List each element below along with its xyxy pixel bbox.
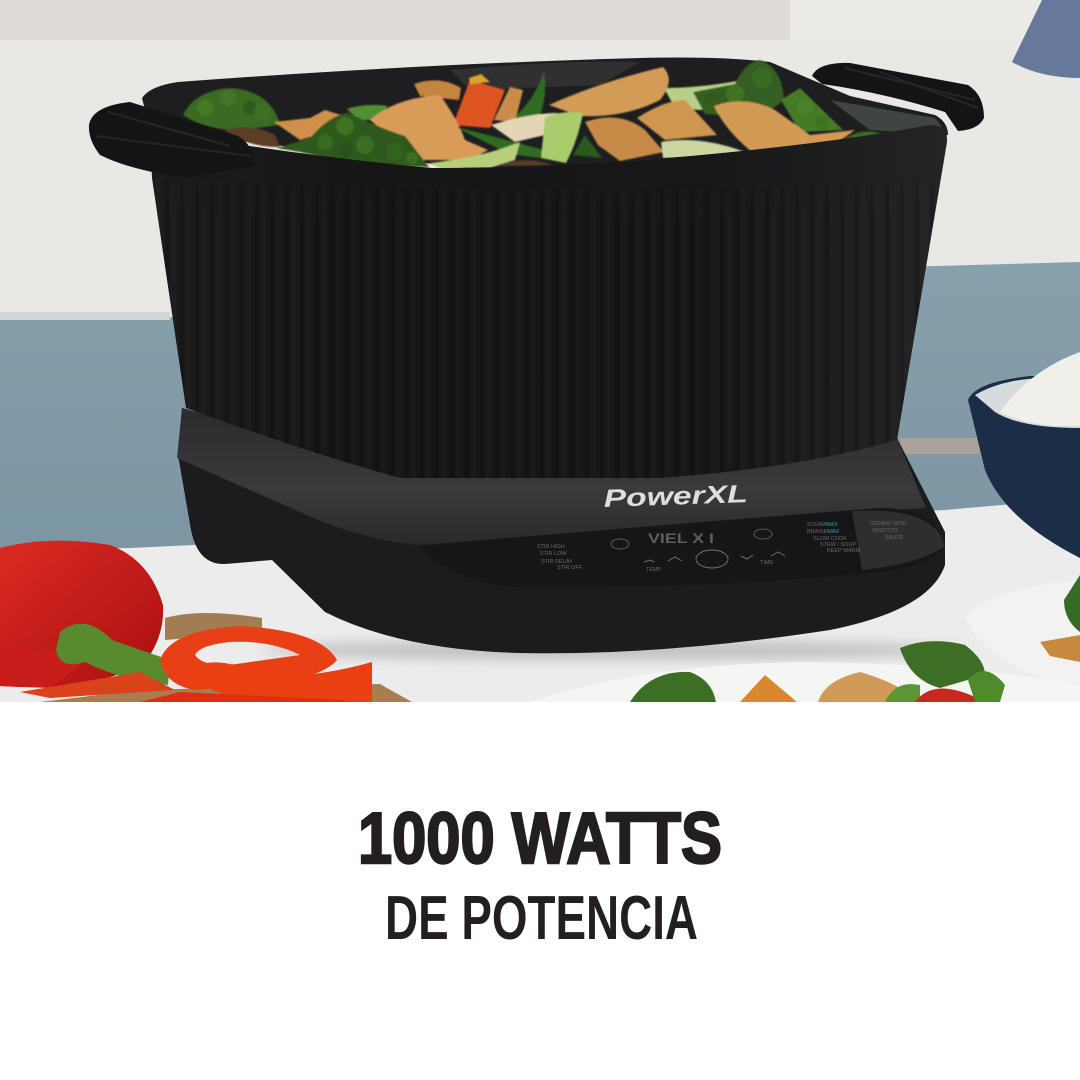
panel labels: STIR OFF [557,565,583,571]
panel labels: BRAISEMAX [807,529,839,535]
panel labels: KEEP WARM [827,548,861,554]
base shadow [260,640,960,660]
rice bowl [968,352,1080,558]
panel labels: STEW / SOUP [820,542,856,548]
broccoli left [183,88,280,130]
panel labels: STIR LOW [540,551,567,557]
mushroom left [224,127,280,147]
mushroom bottom [500,160,552,166]
pot body [150,125,947,478]
sliced pepper rings [20,626,372,702]
panel labels: STEAM / WOK [870,521,907,527]
display readout: VIEL X I [648,530,714,546]
panel labels: TEMP [646,567,662,573]
plate with food: right [965,575,1080,688]
light chicken [491,113,558,142]
right handle [812,63,984,131]
panel labels: STIR DELAY [541,559,573,565]
chicken center [370,95,488,160]
panel labels: TIME [760,560,773,566]
appliance: PowerXL multicooker [89,58,984,660]
red bell pepper [0,541,170,688]
subtitle: DE POTENCIA [385,884,698,953]
start stop button [696,550,728,568]
left handle [89,102,254,178]
panel labels [537,521,907,573]
panel labels: SAUTE [885,535,904,541]
large chicken [549,67,669,116]
chicken small left [274,110,344,140]
pale celery centre [541,112,583,163]
photo: kitchen background [0,0,1080,702]
snow pea [456,127,544,158]
base band [177,408,926,545]
panel labels: RISOTTO [873,528,898,534]
plate with food: bottom [530,641,1080,702]
title: 1000 WATTS [358,799,722,879]
food [183,60,887,168]
cutting board [40,613,412,702]
chicken strip [494,87,523,122]
bottom white panel [0,702,1080,1080]
pot ribbing [165,266,198,412]
blue cloth [1012,0,1080,78]
chicken pieces right [585,118,664,161]
pale celery bottom [429,142,520,168]
marble counter [0,498,1080,702]
chicken top [414,80,461,100]
panel labels: STEAMMAX [807,522,838,528]
panel labels: STIR HIGH [537,544,565,550]
cabinet front [0,262,1080,560]
back vegetables [347,70,743,128]
broccoli centre [277,113,429,167]
top right broccoli [693,60,887,144]
dark broccoli middle [573,135,602,158]
panel labels: SLOW COOK [813,536,847,542]
brand logo: PowerXL [603,480,748,513]
control panel [420,508,945,587]
base unit [178,408,945,653]
pot interior [142,58,948,172]
